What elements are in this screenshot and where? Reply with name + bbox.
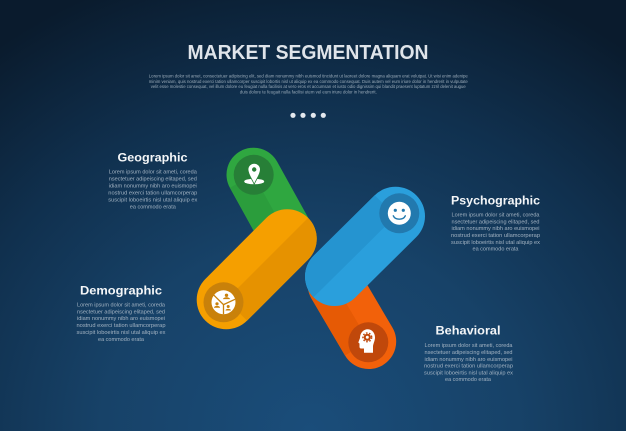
text block: geographic: nostrud exerci tation ullamcorperap [108, 190, 197, 196]
title: MARKET SEGMENTATION [188, 42, 428, 64]
panel: geographic pill [217, 138, 324, 273]
icon: segmented pie with people [204, 282, 244, 322]
text block: demographic: Demographic [80, 284, 162, 298]
text block: geographic: Lorem ipsum dolor sit ameti, coreda [109, 169, 197, 175]
text block: demographic: ea commodo erata [98, 337, 144, 343]
text block: demographic: nsectetuer adipeiscing elitaped, sed [77, 309, 165, 315]
intro paragraph: Lorem ipsum dolor sit amet, consectetuer adipiscing elit, sed diam nonummy nibh euismod tincidunt ut laoreet dolore magna aliquam erat volutpat. Ut wisi enim adenipe [149, 74, 468, 80]
text block: psychographic: ea commodo erata [472, 247, 518, 253]
text block: psychographic: Lorem ipsum dolor sit ameti, coreda [452, 213, 540, 219]
text block: psychographic: nsectetuer adipeiscing elitaped, sed [452, 219, 540, 225]
text block: demographic: Lorem ipsum dolor sit ameti, coreda [77, 302, 165, 308]
text block: behavioral: suscipit loboeirtis nisl utal aliquip ex [424, 370, 513, 376]
text block: geographic: ea commodo erata [130, 205, 176, 211]
icon: smiley face [379, 193, 419, 233]
intro paragraph [149, 74, 468, 96]
text block: geographic: Geographic [118, 151, 188, 165]
intro paragraph: minim veniam, quis nostrud exerci tation ullamcorper suscipit lobortis nisl ut aliquip ex ea commodo consequat. Duis autem vel eum iriure dolor in hendrerit in vulputate [149, 79, 468, 85]
text block: geographic [108, 151, 198, 211]
icon: head with gear [348, 322, 388, 362]
text block: psychographic: suscipit loboeirtis nisl utal aliquip ex [451, 240, 540, 246]
text block: psychographic: Psychographic [451, 193, 540, 207]
text block: demographic: nostrud exerci tation ullamcorperap [76, 323, 166, 329]
text block: geographic: suscipit loboeirtis nisl utal aliquip ex [108, 198, 198, 204]
text block: geographic: nsectetuer adipeiscing elitaped, sed [109, 177, 197, 183]
text block: demographic: idiam nonummy nibh aro euismopei [77, 316, 165, 322]
text block: behavioral [424, 324, 513, 383]
text block: demographic [76, 284, 166, 343]
intro paragraph: duis dolore te feugait nulla facilisi utem vel eum iriure dolor in hendrerit. [240, 90, 377, 96]
text block: psychographic: nostrud exerci tation ullamcorperap [451, 233, 540, 239]
panel: behavioral pill [298, 247, 406, 379]
intro paragraph: velit esse molestie consequat, vel illum dolore eu feugiat nulla facilisis at vero eros et accumsan et iusto odio dignissim qui blandit praesent luptatum zzril delenit augue [151, 84, 466, 90]
text block: psychographic: idiam nonummy nibh aro euismopei [452, 226, 540, 232]
text block: behavioral: nostrud exerci tation ullamcorperap [424, 364, 513, 370]
panel: psychographic pill [293, 174, 437, 318]
pagination dots [290, 113, 326, 118]
text block: psychographic [451, 193, 540, 253]
text block: geographic: idiam nonummy nibh aro euismopei [109, 183, 197, 189]
text block: demographic: suscipit loboeirtis nisl utal aliquip ex [76, 330, 166, 336]
text block: behavioral: Lorem ipsum dolor sit ameti, coreda [424, 343, 513, 349]
text block: behavioral: ea commodo erata [445, 377, 491, 383]
text block: behavioral: nsectetuer adipeiscing elitaped, sed [424, 350, 512, 356]
panel: demographic pill [184, 197, 329, 342]
text block: behavioral: Behavioral [436, 324, 500, 338]
text block: behavioral: idiam nonummy nibh aro euismopei [424, 357, 512, 363]
icon: map pin [234, 155, 274, 195]
